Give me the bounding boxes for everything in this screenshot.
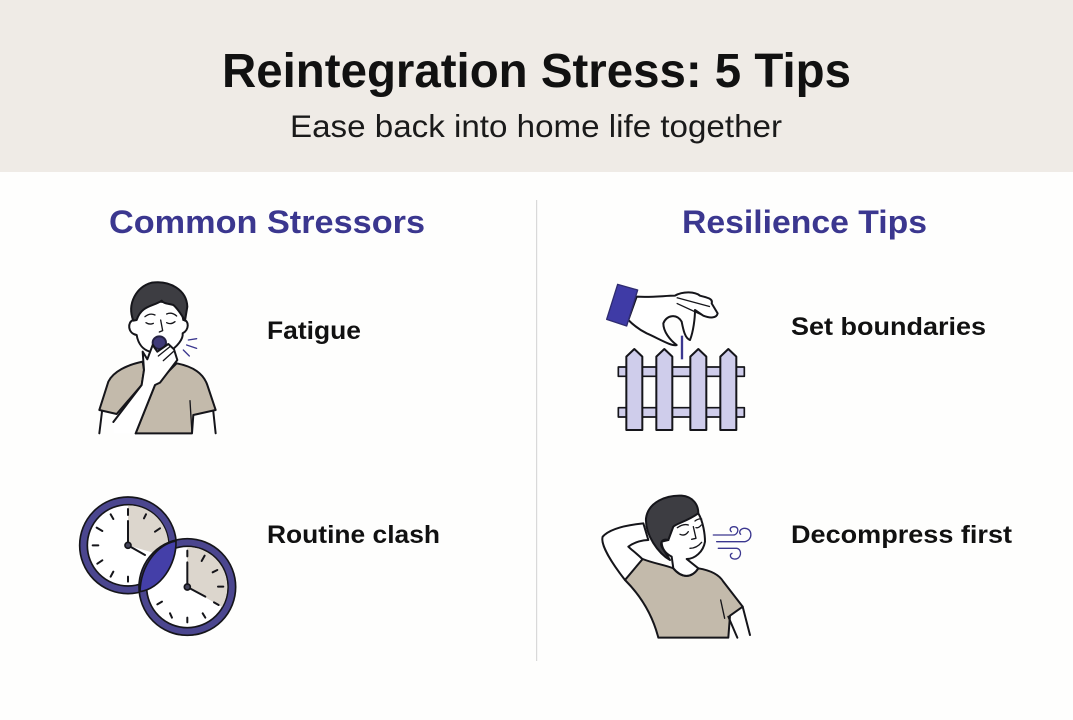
icon: hand and fence: [607, 284, 744, 430]
subtitle: Ease back into home life together: [290, 108, 782, 144]
icon: relaxed man breathing: [602, 496, 751, 638]
title: Reintegration Stress: 5 Tips: [222, 45, 851, 98]
icon: overlapping clocks: [80, 497, 236, 635]
label: routine clash: Routine clash: [267, 521, 440, 549]
label: set boundaries: Set boundaries: [791, 313, 986, 341]
label: fatigue: Fatigue: [267, 317, 361, 345]
panel: common stressors: [80, 204, 440, 635]
heading: resilience tips: Resilience Tips: [682, 204, 927, 240]
icon: yawning man: [99, 282, 216, 433]
panel: resilience tips: [602, 204, 1013, 638]
header band: [0, 0, 1073, 172]
label: decompress first: Decompress first: [791, 521, 1013, 549]
heading: common stressors: Common Stressors: [109, 204, 425, 240]
